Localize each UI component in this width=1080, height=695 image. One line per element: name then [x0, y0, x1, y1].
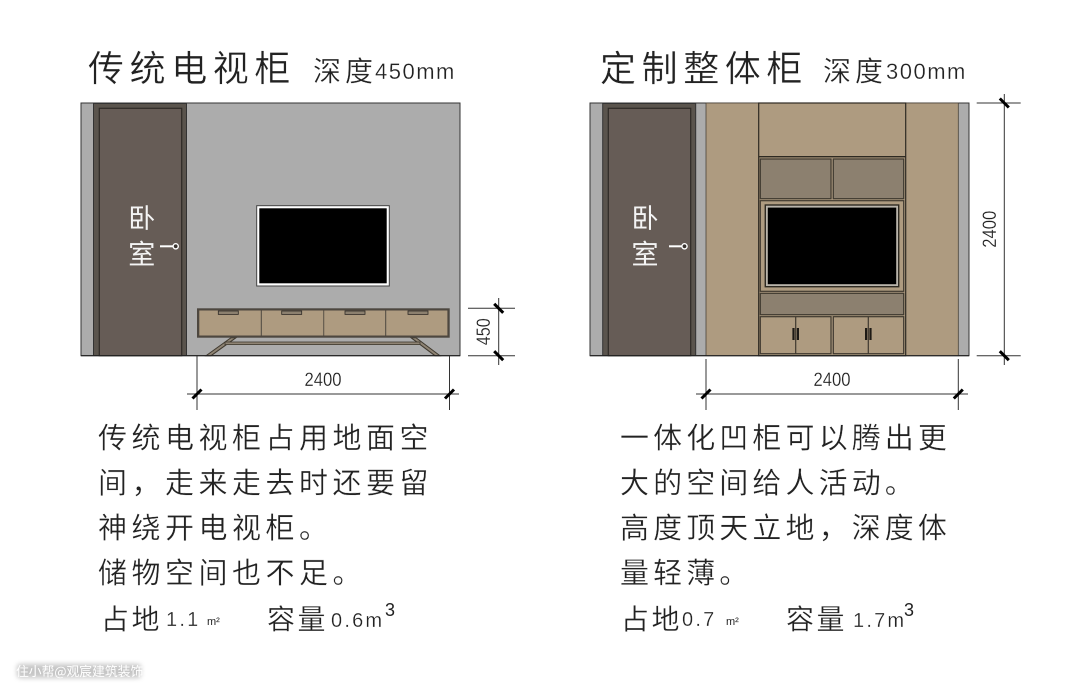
- built-in TV: [765, 205, 899, 287]
- stats: traditional cabinet: 3: [385, 600, 395, 620]
- title: custom integrated cabinet: [600, 40, 967, 92]
- text block: custom cabinet description: 大的空间给人活动。: [620, 460, 918, 502]
- bedroom door: 卧: [128, 197, 155, 236]
- text block: traditional cabinet description: 神绕开电视柜。: [98, 505, 333, 547]
- title: traditional TV cabinet: [88, 40, 456, 92]
- text block: custom cabinet description: [620, 415, 951, 592]
- panel: custom cabinet elevation drawing: [590, 103, 969, 356]
- panel: traditional elevation drawing: [81, 103, 460, 356]
- text block: traditional cabinet description: 储物空间也不足。: [98, 550, 366, 592]
- stats: custom cabinet: m²: [726, 616, 739, 628]
- dimension: width 2400 right: [696, 359, 968, 410]
- title: traditional TV cabinet: 传统电视柜: [88, 40, 296, 92]
- title: custom integrated cabinet: 深度: [823, 50, 887, 90]
- dimension: width 2400 right: 2400: [814, 369, 851, 391]
- bedroom door: [603, 104, 696, 356]
- stats: traditional cabinet: [101, 598, 395, 638]
- title: custom integrated cabinet: 300mm: [886, 59, 967, 84]
- dimension: width 2400 left: 2400: [304, 369, 342, 391]
- text block: traditional cabinet description: 传统电视柜占用地面空: [98, 415, 433, 457]
- stats: custom cabinet: [621, 598, 914, 638]
- bedroom door: 卧: [632, 197, 658, 236]
- dimension: height 2400: 2400: [979, 211, 1001, 248]
- stats: custom cabinet: 容量: [786, 598, 847, 638]
- stats: custom cabinet: 3: [904, 600, 914, 620]
- stats: custom cabinet: 占地: [621, 598, 682, 638]
- stats: traditional cabinet: 0.6m: [331, 610, 384, 632]
- text block: custom cabinet description: 高度顶天立地，深度体: [620, 505, 951, 547]
- bedroom door: [94, 104, 186, 356]
- stats: traditional cabinet: 容量: [267, 598, 328, 638]
- wall: [590, 103, 969, 356]
- text block: custom cabinet description: 量轻薄。: [620, 550, 752, 592]
- text block: custom cabinet description: 一体化凹柜可以腾出更: [620, 415, 951, 457]
- text block: traditional cabinet description: [98, 415, 433, 592]
- wall: [81, 103, 460, 356]
- stats: traditional cabinet: 1.1: [166, 609, 200, 631]
- dimension: height 2400: [977, 94, 1021, 365]
- title: custom integrated cabinet: 定制整体柜: [600, 40, 808, 92]
- stats: custom cabinet: 0.7: [682, 609, 716, 631]
- title: traditional TV cabinet: 深度: [313, 50, 377, 90]
- stats: custom cabinet: 1.7m: [853, 610, 906, 632]
- wall-mounted TV: [257, 206, 389, 286]
- dimension: height 450: 450: [473, 318, 495, 345]
- dimension: height 450: [468, 298, 515, 365]
- stats: traditional cabinet: m²: [207, 616, 220, 628]
- full-height cabinet: [706, 103, 958, 356]
- bedroom door: 室: [632, 233, 658, 272]
- TV cabinet with legs: [197, 308, 450, 356]
- dimension: width 2400 left: [187, 356, 459, 410]
- text block: traditional cabinet description: 间，走来走去时还要留: [98, 460, 433, 502]
- stats: traditional cabinet: 占地: [101, 598, 162, 638]
- title: traditional TV cabinet: 450mm: [375, 59, 456, 84]
- watermark: 住小帮@观宸建筑装饰: [16, 661, 143, 680]
- bedroom door: 室: [128, 233, 155, 272]
